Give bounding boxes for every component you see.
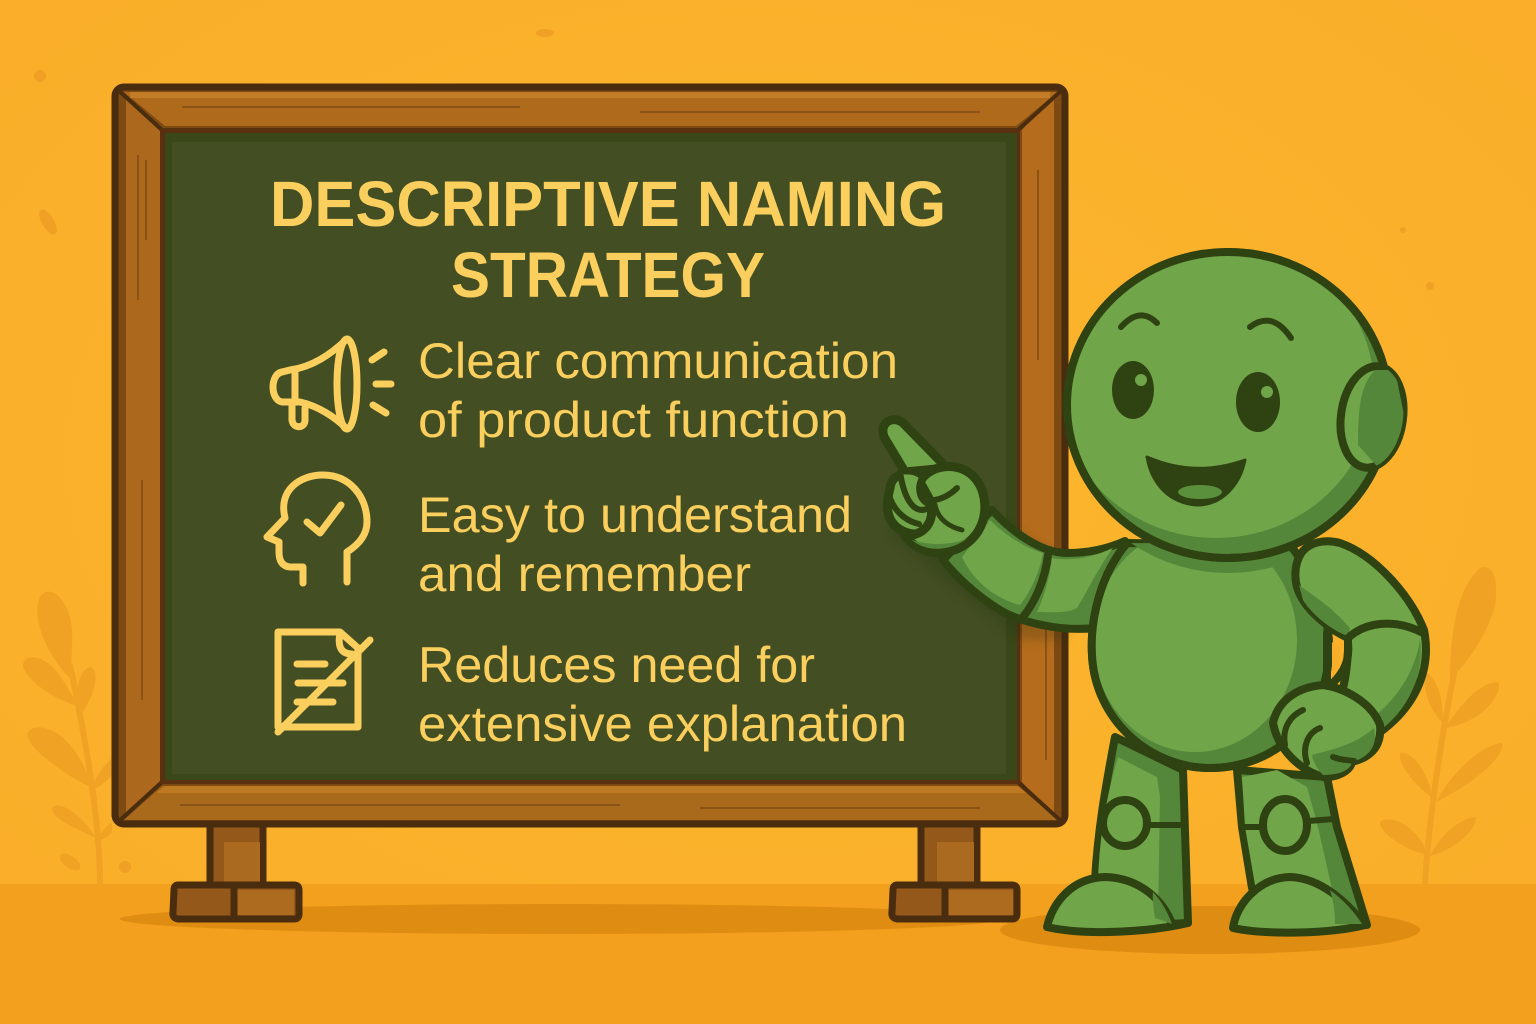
title: DESCRIPTIVE NAMING (270, 168, 946, 240)
arm shadow on board (890, 480, 1067, 640)
bullet text 1 (418, 333, 898, 448)
robot eyes (1112, 361, 1280, 432)
robot character (883, 238, 1426, 933)
gap beside waist (1332, 642, 1341, 675)
bullet text 3: extensive explanation (418, 696, 907, 752)
plant left (23, 592, 112, 884)
board frame (115, 87, 1065, 824)
robot ear (1334, 362, 1410, 475)
bullet text 2: Easy to understand (418, 487, 852, 543)
plant right (1380, 567, 1502, 884)
icon: document with strike pencil (278, 632, 370, 732)
robot head (1058, 238, 1389, 558)
robot hand on hip (1273, 685, 1380, 777)
robot body (1088, 539, 1333, 772)
chalkboard (160, 128, 1020, 784)
robot feet (1047, 877, 1365, 933)
robot left leg (1095, 737, 1188, 925)
robot pointing arm (943, 510, 1125, 629)
robot mouth (1147, 457, 1245, 505)
robot pointing hand (883, 420, 985, 553)
robot raised arm (1295, 541, 1426, 730)
robot eyebrows (1121, 315, 1291, 338)
title (270, 168, 946, 311)
icon: head with check (267, 475, 367, 583)
bullet text 1: Clear communication (418, 333, 898, 389)
bullet text 2: and remember (418, 546, 751, 602)
bullet text 1: of product function (418, 392, 849, 448)
bullet text 3 (418, 637, 907, 752)
robot right leg (1237, 770, 1367, 925)
board legs (173, 824, 1017, 919)
bullet text 3: Reduces need for (418, 637, 815, 693)
bullet text 2 (418, 487, 852, 602)
title: STRATEGY (451, 239, 765, 311)
icon: megaphone (273, 339, 391, 429)
